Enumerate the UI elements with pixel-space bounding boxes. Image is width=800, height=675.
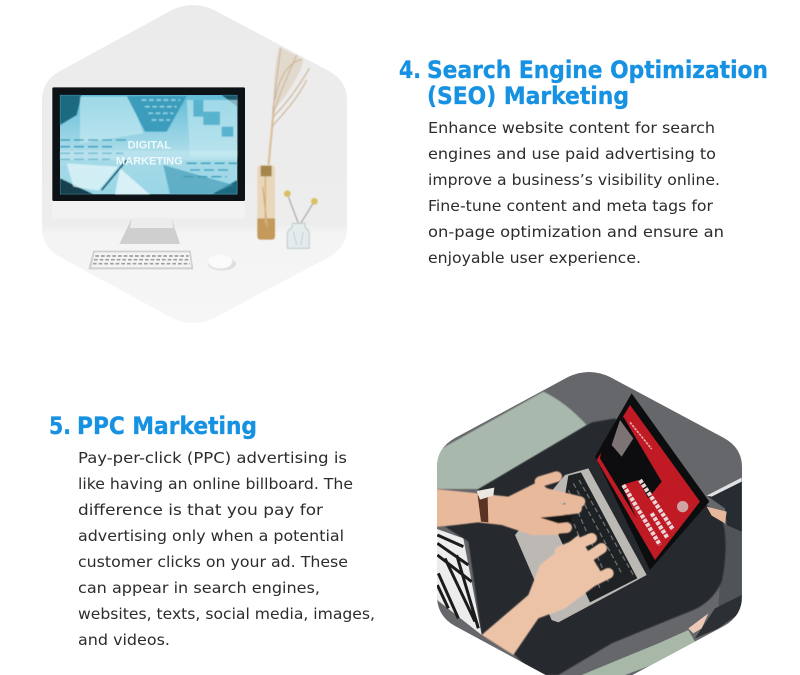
text block: section 4 description — [428, 119, 724, 267]
right grey strip — [718, 525, 742, 608]
striped shirt — [435, 528, 482, 635]
text block: section 5 description: like having an online billboard. The — [78, 475, 353, 493]
icon: small glass vase with dried flowers — [284, 190, 318, 248]
text block: section 5 description — [78, 449, 375, 649]
shoe — [708, 482, 742, 532]
jeans — [445, 418, 725, 675]
background sofa — [435, 365, 745, 675]
text block: section 5 description: advertising only when a potential — [78, 527, 344, 545]
text block: section 5 description: difference is that you pay for — [78, 501, 324, 519]
lower shoe and skin — [695, 595, 742, 638]
text block: section 4 description: Enhance website content for search — [428, 119, 715, 137]
heading: Search Engine Optimization: Search Engine Optimization — [427, 56, 768, 84]
text block: section 4 description: on-page optimization and ensure an — [428, 223, 724, 241]
laptop — [515, 393, 709, 622]
icon: mouse — [208, 260, 236, 270]
icon: amber vase — [257, 166, 275, 240]
text block: section 5 description: customer clicks on your ad. These — [78, 553, 348, 571]
wrists and hands — [435, 477, 608, 655]
text block: section 5 description: can appear in search engines, — [78, 579, 320, 597]
photo: person typing on laptop in hexagon — [435, 365, 745, 675]
heading: section 5 number: 5. — [49, 412, 71, 440]
text block: section 4 description: engines and use paid advertising to — [428, 145, 716, 163]
text block: section 4 description: enjoyable user experience. — [428, 249, 641, 267]
text block: section 4 description: Fine-tune content and meta tags for — [428, 197, 714, 215]
text block: section 5 description: and videos. — [78, 631, 170, 649]
pale cushion at bottom — [582, 630, 695, 675]
heading: section 4 number: 4. — [399, 56, 421, 84]
text block: section 5 description: Pay-per-click (PPC) advertising is — [78, 449, 347, 467]
text block: section 4 description: improve a business’s visibility online. — [428, 171, 720, 189]
icon: keyboard — [88, 251, 193, 269]
text block: section 5 description: websites, texts, social media, images, — [78, 605, 375, 623]
monitor screen label line two: MARKETING — [116, 155, 183, 167]
watch — [477, 488, 494, 522]
icon: monitor — [52, 87, 245, 244]
pillow — [435, 392, 587, 489]
monitor screen label: DIGITAL — [128, 140, 171, 152]
icon: pampas grass — [269, 47, 309, 165]
heading: PPC Marketing: PPC Marketing — [77, 412, 257, 440]
photo: desktop computer on white desk in hexagon — [40, 0, 350, 330]
heading: SEO Marketing: (SEO) Marketing — [427, 82, 629, 110]
laptop screen — [595, 393, 709, 570]
